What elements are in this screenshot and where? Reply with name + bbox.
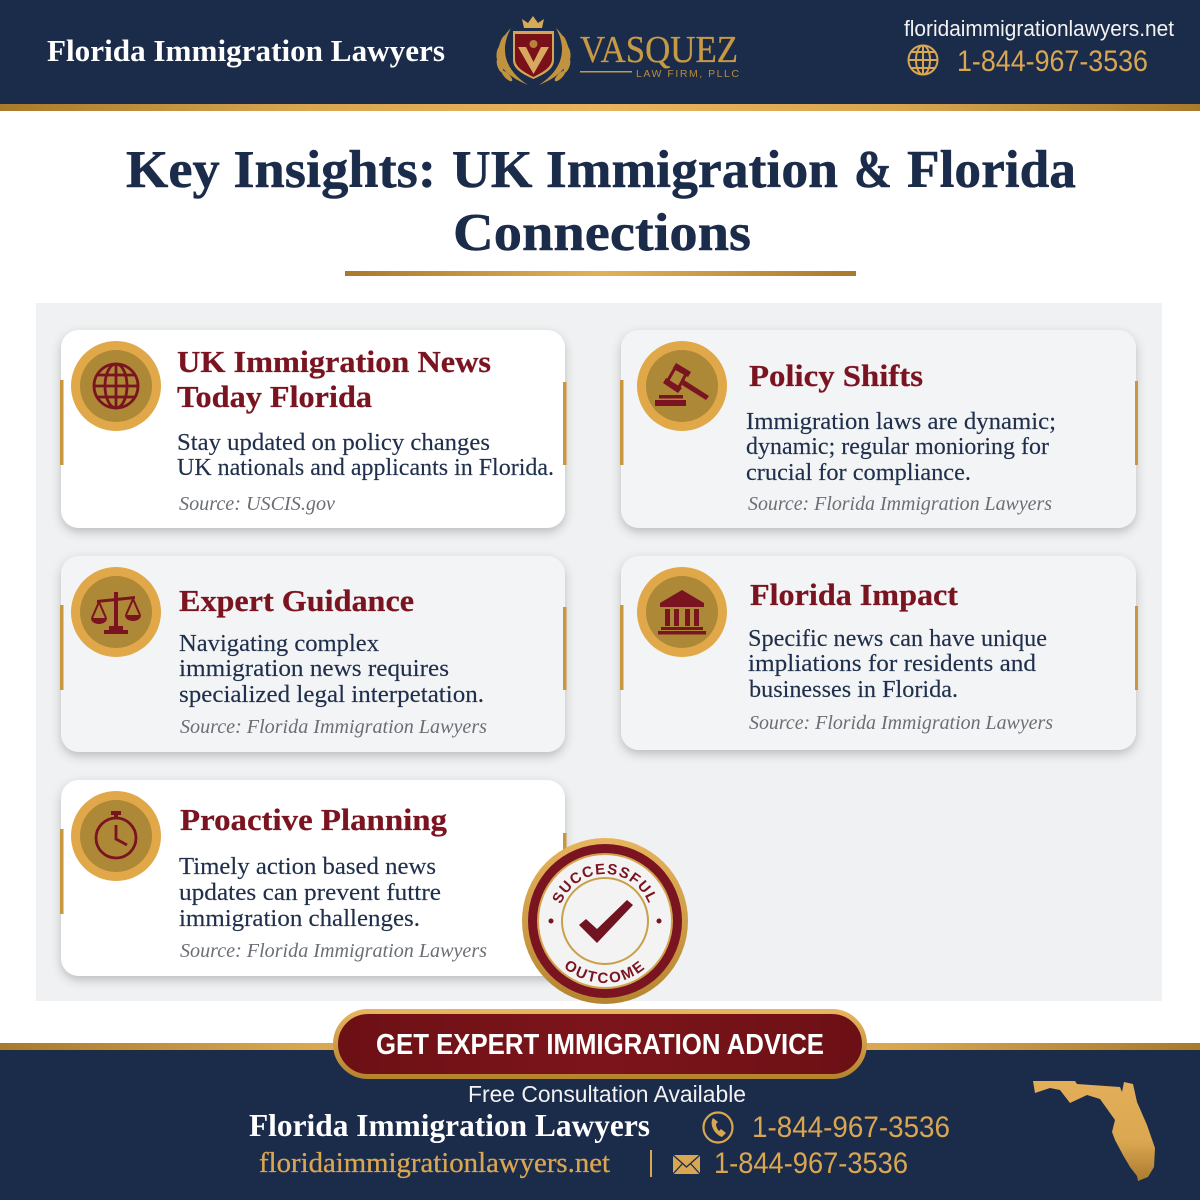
icon: phone <box>704 1112 732 1142</box>
card: Policy Shifts: Immigration laws are dynamic; <box>746 409 1056 435</box>
seal: successful outcome: SUCCESSFUL <box>552 864 656 903</box>
card: Expert Guidance: immigration news requires <box>179 656 449 682</box>
icon: laurel wreath <box>495 16 572 85</box>
card: Florida Impact: Source: Florida Immigration Lawyers <box>749 712 1053 734</box>
icon: shield <box>513 31 554 79</box>
header firm name: Florida Immigration Lawyers <box>47 33 445 68</box>
card: Policy Shifts: Source: Florida Immigration Lawyers <box>748 493 1052 515</box>
footer band <box>0 1043 1200 1200</box>
icon: checkmark <box>579 900 633 943</box>
card: Proactive Planning <box>60 780 566 976</box>
icon: header globe <box>908 46 938 74</box>
call-to-action button <box>336 1012 864 1076</box>
seal: successful outcome <box>522 838 688 1004</box>
card: UK Immigration News: UK nationals and applicants in Florida. <box>177 455 554 481</box>
header band <box>0 0 1200 111</box>
card: Policy Shifts: Policy Shifts <box>749 358 923 393</box>
card: Florida Impact: Florida Impact <box>750 577 959 612</box>
card: UK Immigration News: Source: USCIS.gov <box>179 493 335 515</box>
card: UK Immigration News: Stay updated on policy changes <box>177 430 490 456</box>
logo: crest and wordmark: VASQUEZ <box>580 29 738 71</box>
icon: globe <box>71 341 161 431</box>
card: UK Immigration News: UK Immigration News <box>177 344 491 379</box>
logo: crest and wordmark <box>495 16 739 85</box>
card: UK Immigration News <box>60 330 566 528</box>
card: Proactive Planning: Source: Florida Immigration Lawyers <box>180 940 487 962</box>
icon: Florida map <box>1033 1081 1155 1181</box>
card: Expert Guidance <box>60 556 566 752</box>
main title <box>126 141 1076 276</box>
card: Expert Guidance: Source: Florida Immigration Lawyers <box>180 716 487 738</box>
text: footer website: floridaimmigrationlawyers.net <box>259 1148 610 1179</box>
card: Policy Shifts: dynamic; regular monioring for <box>746 434 1049 460</box>
icon: envelope <box>673 1155 700 1174</box>
content panel <box>36 303 1162 1001</box>
main title: & <box>854 141 892 199</box>
card: Proactive Planning: immigration challenges. <box>179 906 420 932</box>
call-to-action button: GET EXPERT IMMIGRATION ADVICE <box>376 1029 824 1061</box>
card: Proactive Planning: Proactive Planning <box>180 802 448 837</box>
header website: floridaimmigrationlawyers.net <box>904 16 1174 41</box>
text: footer phone: 1-844-967-3536 <box>752 1111 950 1144</box>
text: footer second phone: 1-844-967-3536 <box>714 1147 908 1180</box>
main title: Connections <box>453 204 751 262</box>
card: Expert Guidance: Expert Guidance <box>179 583 414 618</box>
logo: crest and wordmark: LAW FIRM, PLLC <box>636 68 739 80</box>
card: Florida Impact: impliations for residents and <box>748 651 1036 677</box>
header phone: 1-844-967-3536 <box>957 45 1148 78</box>
icon: scales <box>71 567 161 657</box>
card: Proactive Planning: updates can prevent futtre <box>179 880 441 906</box>
main title: UK Immigration <box>452 141 838 199</box>
card: Florida Impact: businesses in Florida. <box>749 677 958 703</box>
main title: Florida <box>907 141 1076 199</box>
card: UK Immigration News: Today Florida <box>177 379 373 414</box>
text: free consultation: Free Consultation Available <box>468 1081 746 1107</box>
icon: courthouse <box>637 567 727 657</box>
card: Policy Shifts <box>620 330 1138 528</box>
card: Policy Shifts: crucial for compliance. <box>746 460 971 486</box>
text: footer firm name: Florida Immigration Lawyers <box>249 1107 650 1143</box>
card: Florida Impact: Specific news can have unique <box>748 626 1047 652</box>
icon: stopwatch <box>71 791 161 881</box>
card: Proactive Planning: Timely action based news <box>179 854 436 880</box>
icon: gavel <box>637 341 727 431</box>
card: Expert Guidance: Navigating complex <box>179 631 379 657</box>
card: Expert Guidance: specialized legal interpetation. <box>179 682 484 708</box>
seal: successful outcome: OUTCOME <box>566 960 644 984</box>
main title: Key Insights: <box>126 141 436 199</box>
card: Florida Impact <box>620 556 1138 750</box>
